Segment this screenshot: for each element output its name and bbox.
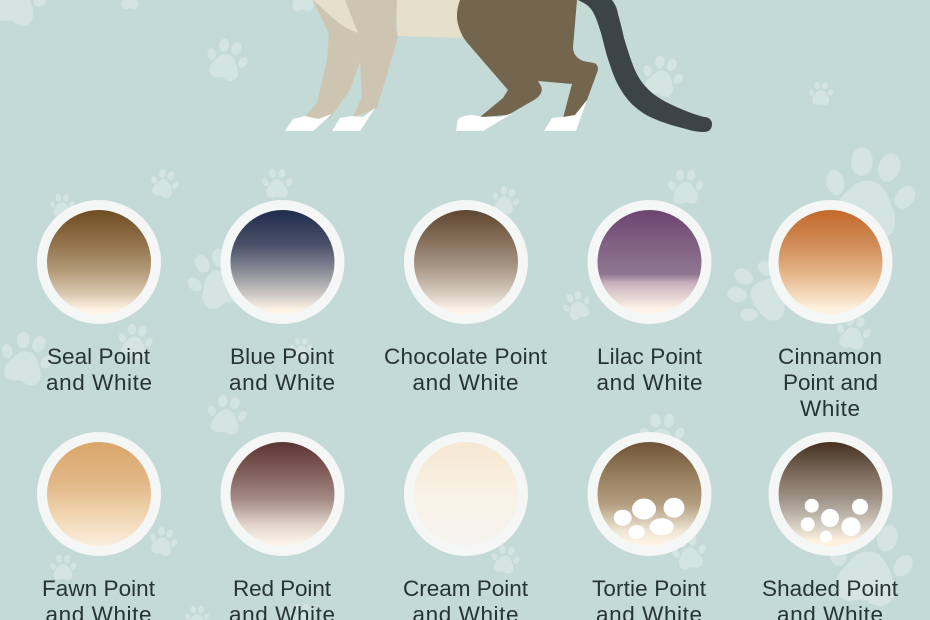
white paws	[285, 100, 587, 131]
swatch: Chocolate Point and White: and White	[412, 370, 518, 395]
swatch: Blue Point and White: Blue Point	[230, 344, 335, 369]
swatch: Cinnamon Point and White: Point and	[783, 370, 878, 395]
swatch: Cream Point and White	[403, 432, 529, 620]
far front leg	[303, 0, 362, 119]
swatch: Cinnamon Point and White: White	[800, 396, 860, 421]
swatch: Lilac Point and White: and White	[596, 370, 702, 395]
near front leg	[345, 0, 398, 118]
swatch: Tortie Point and White: Tortie Point	[592, 576, 707, 601]
swatch: Shaded Point and White: Shaded Point	[762, 576, 899, 601]
swatch: Fawn Point and White: Fawn Point	[42, 576, 156, 601]
swatch: Blue Point and White	[220, 200, 344, 395]
swatch: Cream Point and White: Cream Point	[403, 576, 529, 601]
tortie white patches	[614, 498, 684, 539]
swatch: Seal Point and White: and White	[46, 370, 152, 395]
swatch: Seal Point and White	[37, 200, 161, 395]
swatch: Seal Point and White: Seal Point	[47, 344, 151, 369]
swatch: Chocolate Point and White	[384, 200, 548, 395]
cat tail	[578, 0, 712, 132]
swatch: Shaded Point and White	[762, 432, 899, 620]
swatch: Tortie Point and White	[588, 432, 712, 620]
hind leg	[457, 0, 598, 118]
cat illustration	[285, 0, 712, 132]
swatch: Blue Point and White: and White	[229, 370, 335, 395]
swatch: Cinnamon Point and White	[768, 200, 892, 421]
swatch: Cinnamon Point and White: Cinnamon	[778, 344, 882, 369]
swatch: Fawn Point and White	[37, 432, 161, 620]
swatch: Red Point and White	[220, 432, 344, 620]
shaded white spots	[801, 499, 868, 543]
swatch: Lilac Point and White	[588, 200, 712, 395]
swatch: Lilac Point and White: Lilac Point	[597, 344, 703, 369]
swatch: Chocolate Point and White: Chocolate Point	[384, 344, 548, 369]
swatch: Red Point and White: Red Point	[233, 576, 332, 601]
chest patch	[313, 0, 358, 33]
cat body	[394, 0, 462, 38]
